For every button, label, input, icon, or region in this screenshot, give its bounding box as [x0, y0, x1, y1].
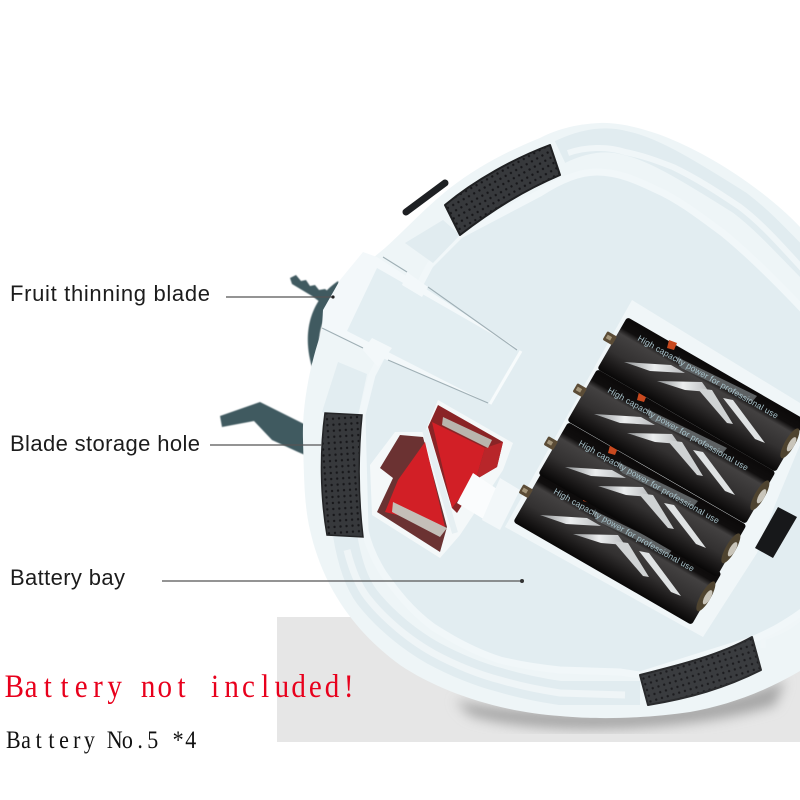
icon: spare blade (teal)	[220, 402, 312, 458]
label: battery bay	[10, 565, 524, 590]
label: fruit thinning blade: Fruit thinning blade	[10, 281, 210, 306]
upper recess by pad	[405, 220, 460, 263]
note: battery type: Battery No.5 *4	[6, 727, 196, 754]
battery 4: High capacity power for professional use	[552, 486, 696, 574]
battery 3	[530, 417, 749, 578]
device body	[303, 123, 800, 718]
side button	[406, 183, 445, 212]
battery 4	[505, 465, 724, 626]
label: blade storage hole: Blade storage hole	[10, 431, 200, 456]
warning: battery not included: Battery not included!	[5, 667, 354, 704]
device shadow	[455, 680, 785, 729]
bottom rubber pad	[640, 637, 761, 705]
label: fruit thinning blade	[10, 281, 335, 306]
battery 1: High capacity power for professional use	[636, 333, 780, 421]
battery 1	[589, 312, 800, 473]
icon: fruit thinning blade (teal)	[290, 275, 342, 367]
grey backdrop panel	[277, 617, 800, 742]
blade slide cover	[322, 252, 521, 404]
outer shell	[303, 123, 800, 718]
battery 2: High capacity power for professional use	[606, 385, 750, 473]
red contact compartment	[370, 400, 520, 558]
top rubber pad	[445, 145, 560, 235]
rim groove	[560, 140, 800, 270]
label: battery bay: Battery bay	[10, 565, 125, 590]
left recess	[322, 362, 367, 425]
battery bay	[505, 300, 800, 637]
rim raised band	[568, 148, 800, 277]
main face	[362, 172, 800, 675]
left rubber pad	[321, 413, 363, 537]
battery 3: High capacity power for professional use	[577, 438, 721, 526]
black sensor window	[755, 507, 797, 558]
battery 2	[559, 364, 778, 525]
